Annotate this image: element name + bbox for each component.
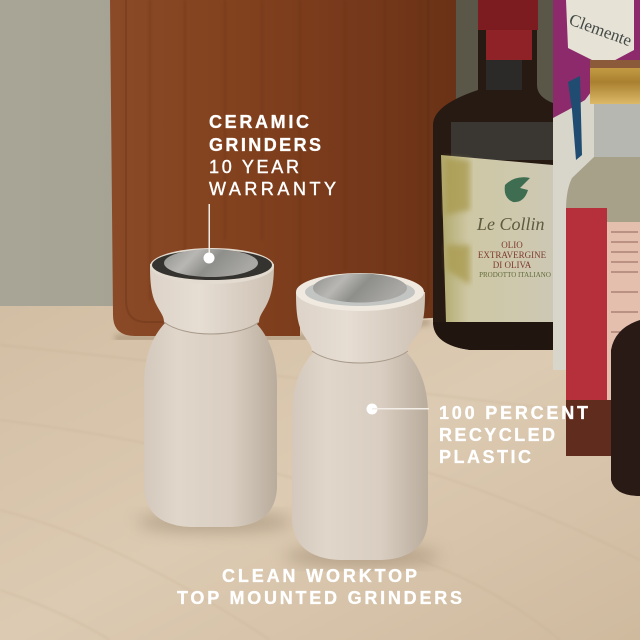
box: Clemente [553,0,640,370]
cutting board [110,0,456,336]
box brand name: Clemente [567,10,634,50]
right grinder head [296,292,425,363]
left grinder body [144,323,277,527]
callout: ceramic grinders: WARRANTY [209,179,336,199]
bottle label text [476,214,551,279]
grinder shadows [137,512,440,566]
olive oil bottle [433,0,553,350]
wall background [0,0,640,320]
wooden worktop [0,306,640,640]
bottle label text: PRODOTTO ITALIANO [479,271,551,279]
dark jar at right edge [611,320,640,496]
right grinder [292,273,428,560]
callout: ceramic grinders: 10 YEAR [209,157,299,177]
callout: recycled plastic [366,403,588,467]
caption: CLEAN WORKTOP [222,566,417,586]
left grinder [144,248,277,527]
left metal disc [164,249,258,277]
bottle label text: Le Collin [476,214,545,234]
callout: recycled plastic: 100 PERCENT [439,403,588,423]
callout: recycled plastic: RECYCLED [439,425,555,445]
left grinder head [150,264,274,334]
right metal disc [313,274,407,302]
bottle label text: EXTRAVERGINE [478,250,547,260]
bottle label text: DI OLIVA [493,260,532,270]
right grinder body [292,352,428,560]
bottle label text: OLIO [501,240,523,250]
small oil bottle [566,60,640,456]
callout: ceramic grinders: GRINDERS [209,135,321,155]
callout: ceramic grinders [204,112,336,264]
callout: recycled plastic: PLASTIC [439,447,531,467]
callout: ceramic grinders: CERAMIC [209,112,309,132]
caption: TOP MOUNTED GRINDERS [177,588,462,608]
caption [177,566,462,608]
